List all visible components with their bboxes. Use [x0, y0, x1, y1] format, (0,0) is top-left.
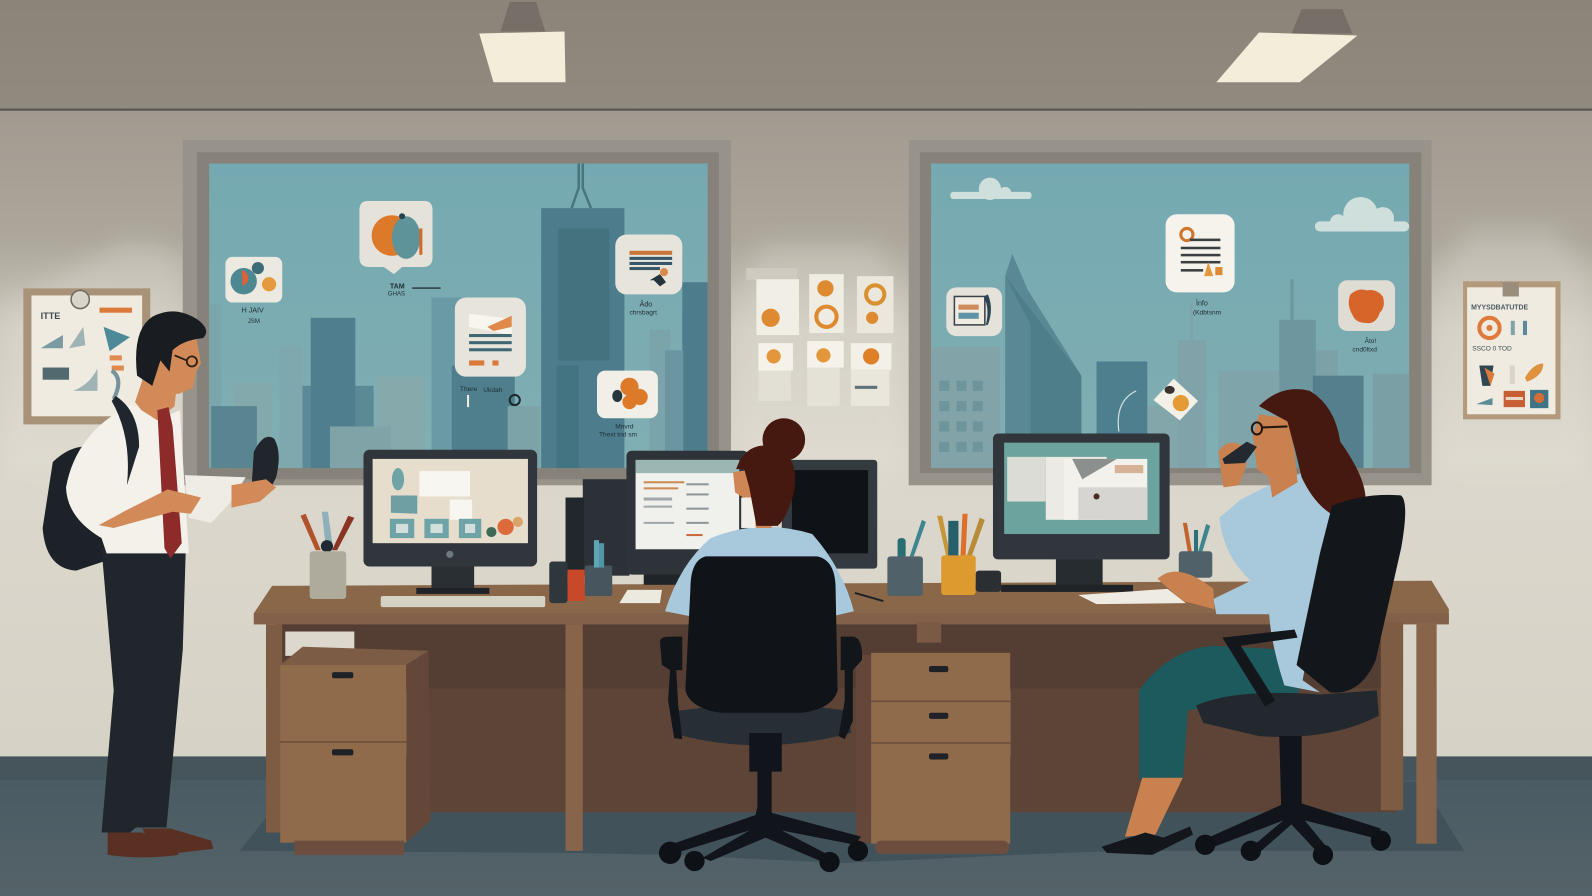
- icon card globe: JSM: [248, 318, 260, 325]
- standing man: [43, 311, 279, 857]
- left wall poster: [23, 288, 150, 424]
- cloud right: [1315, 197, 1409, 231]
- icon diamond card: [1118, 379, 1198, 432]
- face: [1253, 414, 1298, 497]
- shoes: [108, 833, 179, 857]
- left drawer unit: [280, 647, 430, 855]
- pencil cup grey: [887, 520, 926, 596]
- icon card document list: Ìnfo: [1196, 299, 1208, 308]
- backpack strap: [112, 396, 139, 485]
- desk legs: [266, 622, 1437, 851]
- desk organisers: [549, 540, 612, 603]
- wall: [0, 110, 1592, 759]
- backpack: [43, 447, 107, 571]
- monitor right: [993, 434, 1170, 592]
- seated woman right: [1102, 389, 1366, 855]
- wheels: [659, 841, 868, 872]
- stapler: [976, 571, 1001, 592]
- backrest: [1297, 495, 1405, 693]
- icon card flag chart: Ādo: [640, 301, 652, 309]
- base: [670, 812, 861, 861]
- ceiling: [0, 0, 1592, 111]
- centre wall sticky notes: [746, 268, 893, 406]
- wheels: [1195, 831, 1391, 865]
- icon card orange blob: Mnvrd: [615, 423, 634, 430]
- phone: [252, 437, 279, 485]
- armrest: [1222, 629, 1298, 707]
- glasses: [175, 355, 197, 367]
- tie: [157, 407, 182, 558]
- backrest: [685, 556, 838, 713]
- right wall poster: [1463, 281, 1561, 419]
- neck: [135, 376, 178, 424]
- seated woman centre: [665, 418, 854, 616]
- arm front: [97, 489, 201, 528]
- right wall poster: MYYSDBATUTDE: [1471, 305, 1528, 312]
- skin: [733, 467, 772, 528]
- wall light cones: [0, 228, 1592, 477]
- icon card document chart: There: [460, 386, 477, 393]
- skyline right: [931, 254, 1409, 468]
- icon card orange emblem: [1338, 280, 1395, 353]
- icon card orange blob: [597, 371, 658, 439]
- icon card globe: [225, 257, 282, 325]
- long hair: [1259, 389, 1366, 518]
- icon card orange blob: Thext tnd sm: [599, 432, 638, 439]
- icon card globe: H JAIV: [242, 307, 264, 315]
- monitor black right of centre: [782, 460, 877, 569]
- pencil cup right: [1179, 523, 1212, 578]
- right drawer unit: [856, 653, 1010, 854]
- lower leg: [1125, 778, 1183, 837]
- icon card document list: [1166, 214, 1235, 317]
- window right: [909, 140, 1432, 485]
- pencil cup left: [301, 512, 354, 599]
- sky: [931, 163, 1409, 468]
- shirt: [1213, 472, 1332, 692]
- face: [142, 330, 201, 394]
- shirt: [66, 404, 189, 553]
- icon card tablet: [946, 287, 1002, 336]
- monitor centre with tower: [566, 451, 748, 585]
- monitor left: [363, 450, 537, 594]
- icon card pie speech bubble: [359, 201, 441, 297]
- resting hand: [1157, 572, 1214, 609]
- icon card orange emblem: Āto!: [1365, 337, 1376, 345]
- icon card pie speech bubble: GHAS: [388, 290, 405, 297]
- floor: [0, 780, 1592, 896]
- post: [749, 733, 782, 833]
- papers on desk: [619, 589, 1186, 604]
- phone hand: [1218, 443, 1247, 487]
- hair: [136, 311, 206, 386]
- icon card flag chart: chrsbagrt: [629, 310, 657, 317]
- forearm to phone: [231, 479, 276, 508]
- right office chair: [1195, 495, 1405, 865]
- paper: [185, 475, 246, 523]
- sky: [209, 163, 708, 468]
- ceiling lamp right: [1216, 9, 1357, 82]
- icon card flag chart: [615, 235, 682, 317]
- seat: [678, 705, 851, 745]
- centre office chair: [659, 556, 868, 872]
- desk top: [254, 581, 1449, 624]
- glasses: [1252, 422, 1287, 435]
- icon card pie speech bubble: TAM: [390, 282, 405, 290]
- window left: [183, 140, 731, 485]
- back desk panel: [276, 621, 1396, 812]
- keyboard: [381, 596, 545, 607]
- seat: [1196, 690, 1379, 737]
- cloud left: [950, 178, 1032, 200]
- pencil cup yellow: [937, 514, 985, 595]
- left wall poster: ITTE: [41, 311, 60, 321]
- skyline left: [209, 163, 708, 468]
- shirt: [665, 527, 854, 616]
- icon card orange emblem: cnd0ltxd: [1352, 346, 1377, 353]
- post: [1279, 736, 1302, 812]
- legs: [1139, 646, 1300, 780]
- floor shadow: [240, 782, 1464, 863]
- hair: [736, 445, 795, 526]
- base: [1208, 802, 1381, 855]
- icon card document chart: [455, 297, 526, 407]
- right wall poster: ЅSCO 0 TOD: [1472, 345, 1512, 352]
- shoes: [1102, 826, 1193, 855]
- baseboard: [0, 756, 1592, 781]
- arm rests: [660, 637, 682, 739]
- icon card document chart: Ukdah: [483, 387, 503, 394]
- trousers: [102, 548, 186, 833]
- bun: [762, 418, 805, 461]
- ceiling lamp left: [479, 2, 566, 82]
- icon card document list: (Kdbtsnm: [1193, 310, 1222, 317]
